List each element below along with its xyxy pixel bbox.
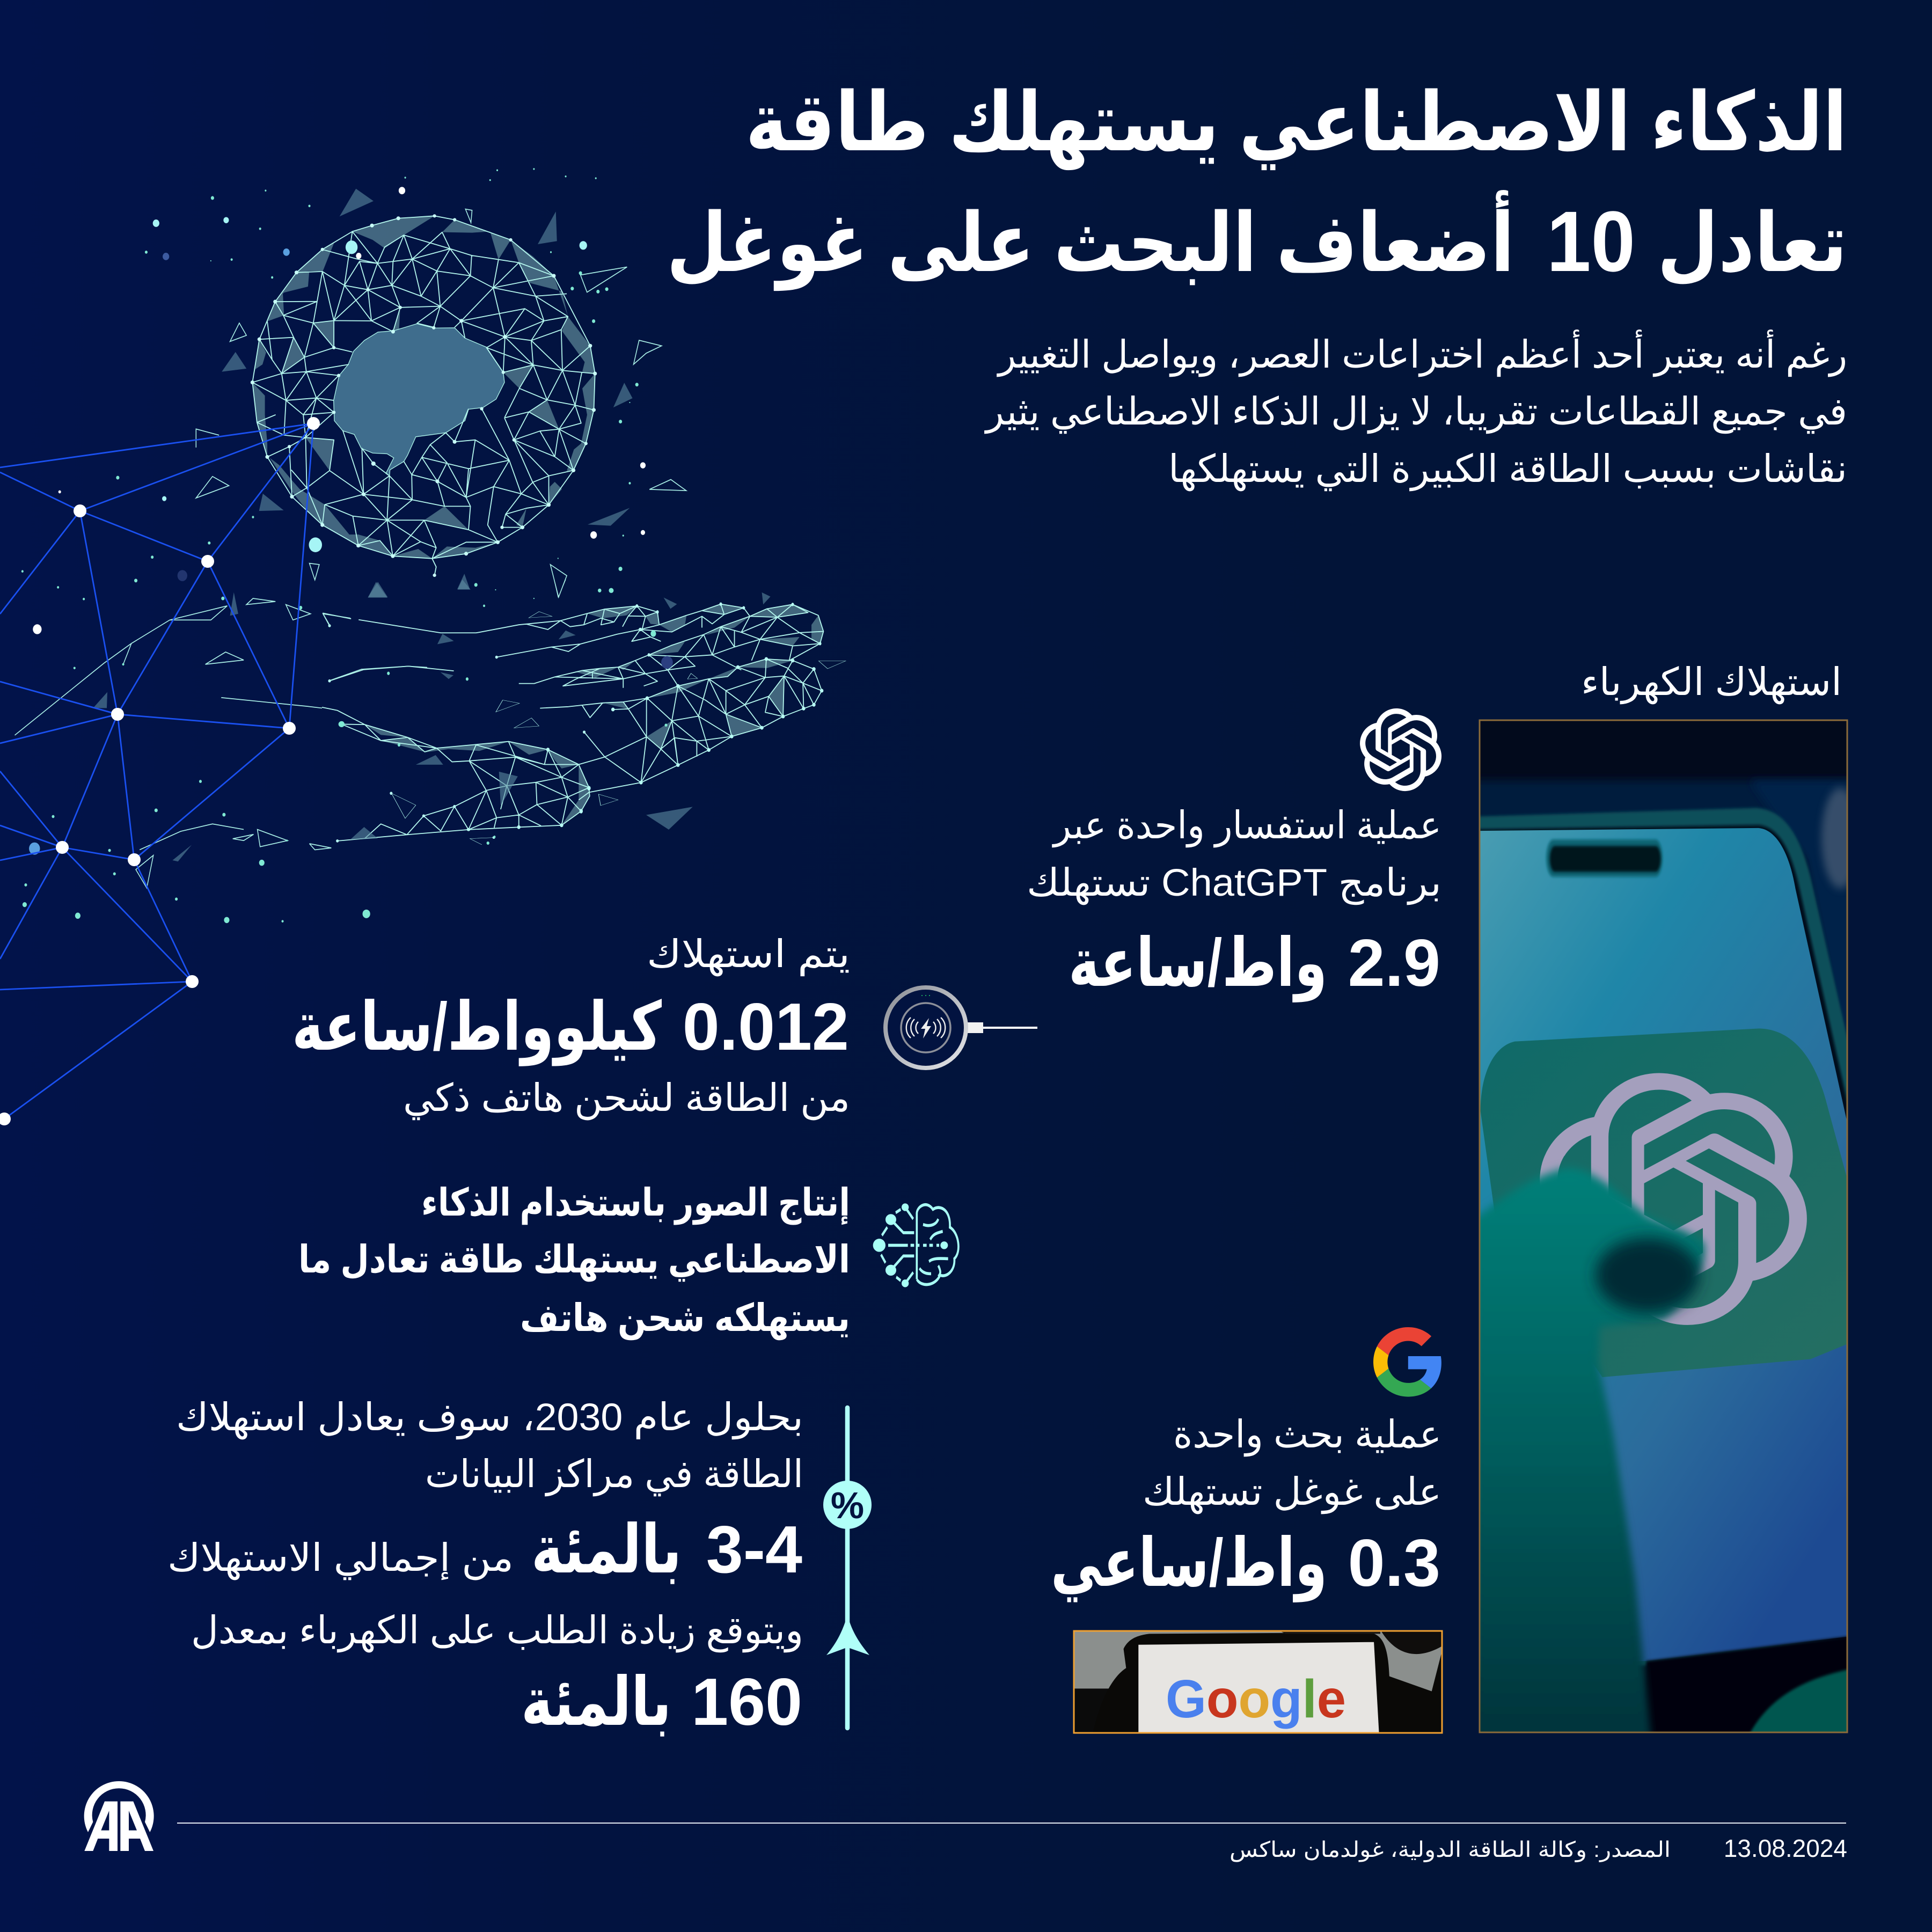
- 2030 forecast text: بالمئة: [521, 1665, 671, 1739]
- title: أضعاف البحث على غوغل: [667, 190, 1514, 291]
- title: [667, 77, 1847, 291]
- Google G logo: [1373, 1327, 1441, 1397]
- ChatGPT consumption text: [1027, 804, 1441, 1002]
- photo: finger on ChatGPT app: [1474, 716, 1860, 1744]
- network of blue lines and white nodes: [0, 417, 320, 1125]
- smartphone charging text: 0.012: [683, 990, 849, 1064]
- Google consumption text: عملية بحث واحدة: [1173, 1414, 1441, 1457]
- Google consumption text: [1051, 1414, 1441, 1602]
- smartphone charging text: من الطاقة لشحن هاتف ذكي: [403, 1077, 850, 1121]
- illustration: brain sphere, network and hand: [0, 168, 846, 1125]
- Google consumption text: 0.3: [1348, 1526, 1440, 1600]
- photo frame: [1480, 720, 1847, 1732]
- Google consumption text: واط/ساعي: [1051, 1526, 1327, 1602]
- smartphone charging text: يتم استهلاك: [647, 933, 850, 977]
- ChatGPT logo: [1360, 708, 1441, 791]
- date: 13.08.2024: [1724, 1834, 1847, 1862]
- intro text: [984, 330, 1847, 492]
- scattered particles, shards and arm contours: [15, 168, 686, 923]
- image generation text: يستهلكه شحن هاتف: [520, 1297, 850, 1340]
- AI brain icon: [873, 1203, 958, 1287]
- ChatGPT consumption text: برنامج ChatGPT تستهلك: [1027, 862, 1441, 905]
- section label: electricity consumption: استهلاك الكهرباء: [1581, 661, 1842, 705]
- hand mesh: [322, 580, 846, 845]
- photo: Google on phone: [1072, 1630, 1445, 1735]
- 2030 forecast text: [167, 1396, 803, 1739]
- intro text: رغم أنه يعتبر أحد أعظم اختراعات العصر، ويواصل التغيير: [997, 330, 1847, 377]
- Google photo frame: [1074, 1631, 1442, 1733]
- 2030 forecast text: 3-4: [706, 1513, 802, 1587]
- percent arrow timeline: %: [831, 1484, 864, 1526]
- ChatGPT consumption text: واط/ساعة: [1069, 926, 1327, 1002]
- image generation text: إنتاج الصور باستخدام الذكاء: [421, 1182, 850, 1225]
- smartphone charging text: كيلوواط/ساعة: [292, 990, 662, 1066]
- footer rule: [177, 1823, 1846, 1824]
- source: المصدر: وكالة الطاقة الدولية، غولدمان ساكس: [1230, 1838, 1671, 1862]
- title: 10: [1547, 193, 1635, 289]
- sphere mesh with brain: [251, 214, 597, 577]
- ChatGPT consumption text: 2.9: [1348, 926, 1440, 1000]
- 2030 forecast text: 160: [691, 1665, 802, 1739]
- percent arrow timeline: [823, 1408, 872, 1728]
- 2030 forecast text: بالمئة: [531, 1512, 682, 1587]
- ChatGPT consumption text: عملية استفسار واحدة عبر: [1052, 804, 1441, 848]
- Google consumption text: على غوغل تستهلك: [1143, 1471, 1441, 1514]
- intro text: نقاشات بسبب الطاقة الكبيرة التي يستهلكها: [1168, 448, 1847, 492]
- AA logo: [84, 1781, 154, 1851]
- 2030 forecast text: من إجمالي الاستهلاك: [167, 1537, 514, 1580]
- intro text: في جميع القطاعات تقريبا، لا يزال الذكاء الاصطناعي يثير: [984, 391, 1847, 434]
- image generation text: [298, 1182, 850, 1340]
- wireless charger icon: [885, 987, 1037, 1068]
- Google wordmark: Google: [1166, 1669, 1346, 1729]
- 2030 forecast text: الطاقة في مراكز البيانات: [425, 1453, 803, 1497]
- 2030 forecast text: ويتوقع زيادة الطلب على الكهرباء بمعدل: [191, 1609, 803, 1653]
- smartphone charging text: [292, 933, 850, 1121]
- title: تعادل: [1657, 197, 1847, 289]
- 2030 forecast text: بحلول عام 2030، سوف يعادل استهلاك: [176, 1396, 803, 1440]
- image generation text: الاصطناعي يستهلك طاقة تعادل ما: [298, 1239, 850, 1282]
